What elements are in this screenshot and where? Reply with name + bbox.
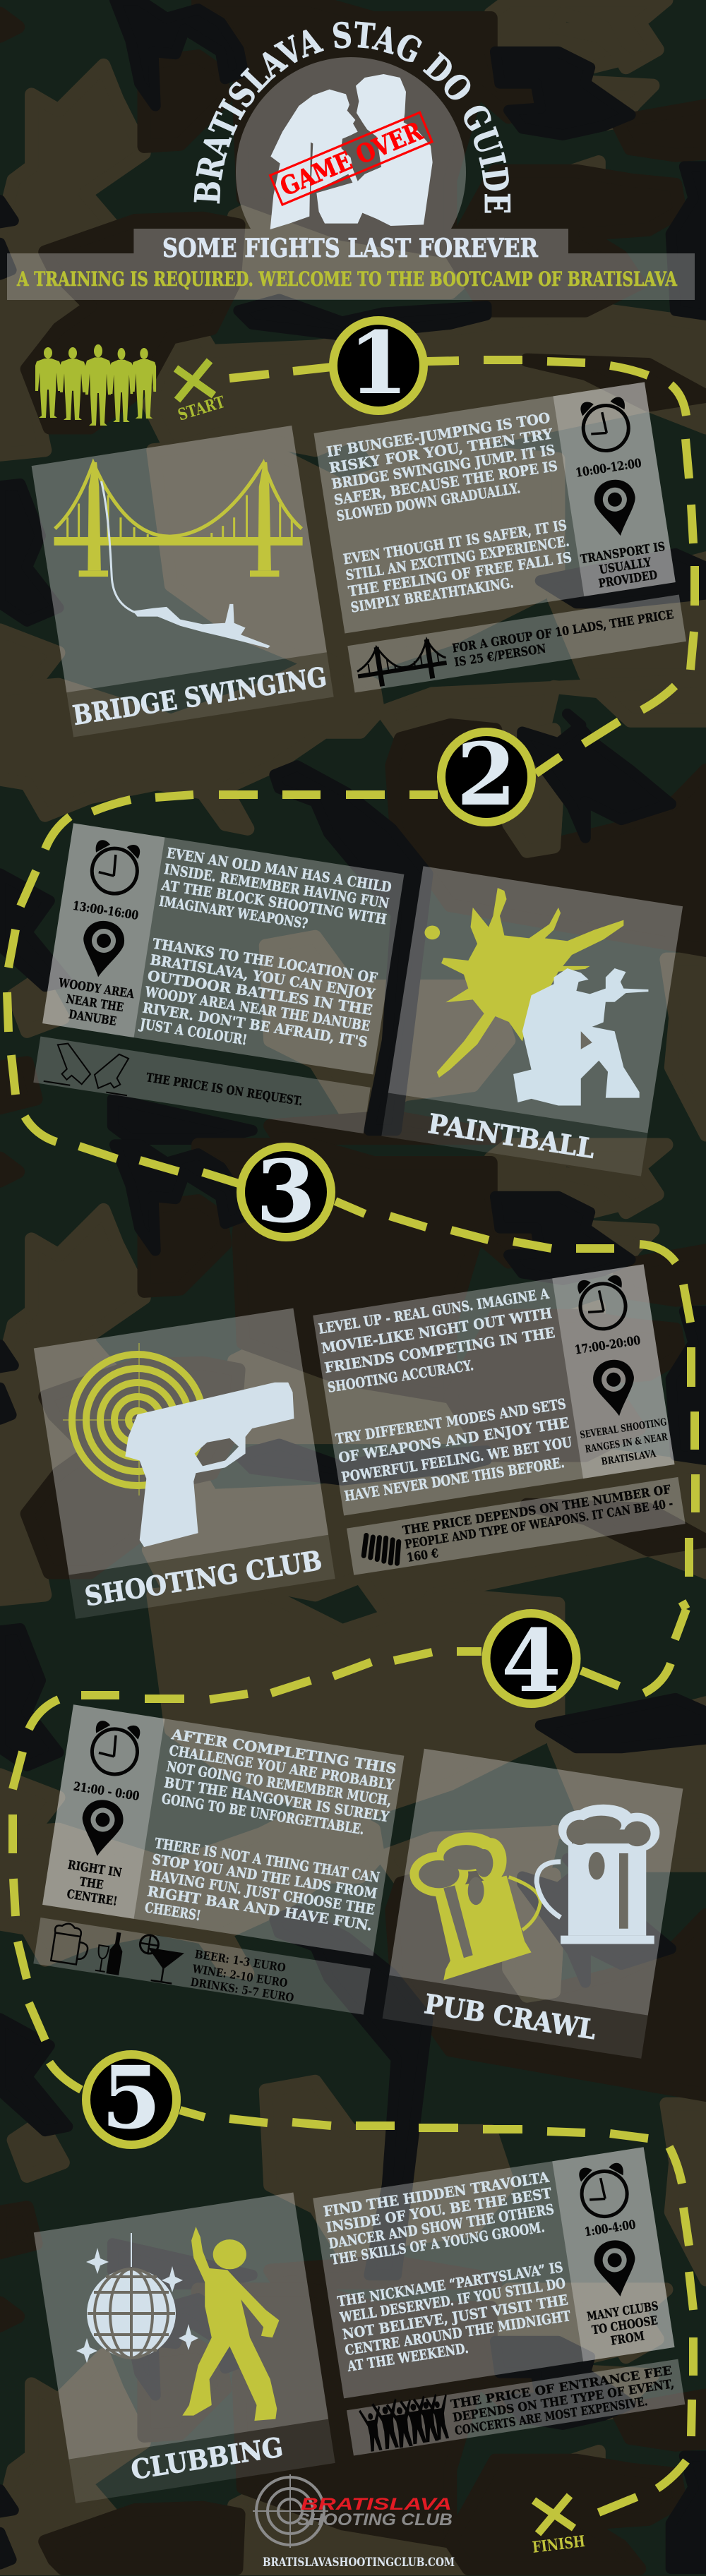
location: CENTRE! <box>66 1887 118 1909</box>
icon: clock <box>89 839 141 897</box>
icon column <box>552 2147 675 2361</box>
time: 21:00 - 0:00 <box>73 1780 140 1804</box>
paragraph 2: THERE IS NOT A THING THAT CAN <box>154 1834 381 1886</box>
paragraph 2: RIGHT BAR AND HAVE FUN. <box>146 1882 373 1934</box>
price list: DRINKS: 5-7 EURO <box>190 1975 295 2004</box>
paragraph 1 <box>160 1726 398 1841</box>
finish mark <box>532 2496 586 2557</box>
time: 17:00-20:00 <box>574 1333 642 1358</box>
paragraph 2: NOT BELIEVE, JUST VISIT THE <box>341 2291 569 2343</box>
time: 13:00-16:00 <box>72 899 140 923</box>
number 1: 1 <box>349 312 408 414</box>
finish label: FINISH <box>532 2532 586 2557</box>
location: RIGHT IN <box>67 1858 123 1880</box>
icon: beer mug <box>50 1922 91 1966</box>
paragraph 2: BRATISLAVA, YOU CAN ENJOY <box>149 951 376 1003</box>
location: BRATISLAVA <box>601 1448 657 1468</box>
paragraph 1: INSIDE. REMEMBER HAVING FUN <box>163 860 390 912</box>
paragraph 1 <box>322 2168 558 2268</box>
panel title: BRIDGE SWINGING <box>71 661 329 731</box>
panel background <box>34 1308 335 1619</box>
location: WOODY AREA <box>57 976 136 1001</box>
panel title: PAINTBALL <box>426 1107 597 1164</box>
icon: crossed paintball guns <box>43 1041 133 1095</box>
title arc: BRATISLAVA STAG DO GUIDE <box>193 21 511 213</box>
game over stamp: GAME OVER <box>276 116 427 202</box>
number 3 <box>241 1140 331 1242</box>
section 4: price panel <box>33 1918 371 2016</box>
panel title: SHOOTING CLUB <box>83 1544 324 1612</box>
icon: location pin <box>592 2237 640 2299</box>
paragraph 1: GOING TO BE UNFORGETTABLE. <box>160 1790 366 1838</box>
location: PROVIDED <box>597 568 659 591</box>
paragraph 2: THE NICKNAME “PARTYSLAVA” IS <box>336 2258 564 2310</box>
section 2: price panel <box>33 1036 371 1133</box>
location: FROM <box>610 2329 645 2349</box>
icon column <box>42 1704 164 1919</box>
icon: location pin <box>592 477 640 539</box>
paragraph 2: HAVING FUN. JUST CHOOSE THE <box>149 1867 376 1918</box>
section 3: price panel <box>347 1477 686 1575</box>
icon: clock <box>578 2162 630 2220</box>
icon: shooting target <box>63 1343 203 1495</box>
paragraph 2: TRY DIFFERENT MODES AND SETS <box>335 1395 567 1448</box>
paragraph 2: HAVE NEVER DONE THIS BEFORE. <box>343 1454 566 1505</box>
section 5: image panel <box>34 2192 335 2503</box>
icon: yellow beer mug <box>409 1832 540 1980</box>
start mark <box>176 361 227 425</box>
number 3: 3 <box>256 1140 316 1242</box>
time: 10:00-12:00 <box>575 457 642 481</box>
price text: DEPENDS ON THE TYPE OF EVENT, <box>452 2377 675 2425</box>
paragraph 1: DANCER AND SHOW THE OTHERS <box>327 2201 555 2252</box>
paragraph 1: LEVEL UP - REAL GUNS. IMAGINE A <box>317 1284 551 1337</box>
paragraph 2: CENTRE AROUND THE MIDNIGHT <box>344 2307 572 2359</box>
paragraph 2: THANKS TO THE LOCATION OF <box>151 935 378 987</box>
paragraph 1: AT THE BLOCK SHOOTING WITH <box>160 877 388 928</box>
location: DANUBE <box>68 1008 117 1029</box>
paragraph 2: RIVER. DON'T BE AFRAID, IT'S <box>141 999 369 1051</box>
paragraph 2: STILL AN EXCITING EXPERIENCE. <box>345 533 570 584</box>
paragraph 2: WELL DESERVED. IF YOU STILL DO <box>338 2275 567 2326</box>
start label: START <box>176 392 227 425</box>
icon: pistol <box>125 1383 294 1547</box>
location: NEAR THE <box>65 992 124 1015</box>
section 1: text panel <box>313 382 676 634</box>
number 2 <box>441 723 532 825</box>
icon: location pin <box>590 1357 640 1419</box>
price list <box>189 1947 299 2004</box>
icon: suspension bridge <box>54 462 303 577</box>
logo word 2: SHOOTING CLUB <box>297 2510 453 2529</box>
paragraph 2: OF WEAPONS AND ENJOY THE <box>337 1414 570 1467</box>
paragraph 1: SHOOTING ACCURACY. <box>326 1356 474 1396</box>
icon: clock <box>89 1720 141 1777</box>
location <box>579 1416 672 1470</box>
bungee jumper <box>102 481 270 648</box>
icon column <box>553 382 676 596</box>
crosshair <box>253 2474 328 2548</box>
location: USUALLY <box>598 555 652 577</box>
price list: BEER: 1-3 EURO <box>194 1947 287 1975</box>
paragraph 2 <box>342 517 575 616</box>
paragraph 1 <box>157 844 393 944</box>
number 1 <box>333 312 424 414</box>
location: THE <box>78 1875 104 1893</box>
number 5 <box>86 2047 176 2148</box>
icon: dancing crowd <box>358 2390 453 2453</box>
icon: clock <box>576 1275 629 1332</box>
number 5: 5 <box>102 2047 161 2148</box>
paragraph 2: OUTDOOR BATTLES IN THE <box>146 967 373 1018</box>
paragraph 2: WOODY AREA NEAR THE DANUBE <box>143 983 371 1035</box>
section 3: image panel <box>34 1308 335 1619</box>
icon: clock <box>579 396 632 454</box>
price text <box>450 2364 677 2438</box>
panel title: PUB CRAWL <box>422 1987 598 2045</box>
icon: disco dancer <box>182 2227 279 2421</box>
paragraph 2: STOP YOU AND THE LADS FROM <box>151 1850 378 1902</box>
icon: light beer mug <box>537 1805 659 1944</box>
logo word 1: BRATISLAVA <box>301 2495 452 2514</box>
paragraph 2 <box>335 1395 576 1505</box>
panel background <box>381 866 683 1176</box>
start group of men <box>35 344 156 426</box>
paragraph 1: FRIENDS COMPETING IN THE <box>323 1324 556 1376</box>
price list: WINE: 2-10 EURO <box>191 1962 289 1990</box>
icon: location pin <box>77 1797 126 1859</box>
paragraph 1 <box>317 1284 559 1396</box>
paragraph 1: SAFER, BECAUSE THE ROPE IS <box>333 457 558 508</box>
number 4: 4 <box>501 1610 561 1711</box>
paragraph 1: EVEN AN OLD MAN HAS A CHILD <box>165 844 393 896</box>
icon column <box>42 823 164 1037</box>
price text: THE PRICE IS ON REQUEST. <box>145 1071 304 1109</box>
price text: 160 € <box>406 1546 440 1565</box>
price text: THE PRICE OF ENTRANCE FEE <box>450 2364 673 2412</box>
location: RANGES IN & NEAR <box>585 1431 669 1455</box>
paragraph 1: BRIDGE SWINGING JUMP. IT IS <box>330 441 556 493</box>
slogan: SOME FIGHTS LAST FOREVER <box>162 234 539 263</box>
location <box>52 976 136 1031</box>
icon: bridge <box>354 637 449 690</box>
panel background <box>32 426 334 738</box>
price text: THE PRICE DEPENDS ON THE NUMBER OF <box>402 1483 672 1538</box>
section 5: price panel <box>346 2354 685 2456</box>
paragraph 1: CHALLENGE YOU ARE PROBABLY <box>168 1742 395 1793</box>
paragraph 2 <box>335 2258 574 2375</box>
paragraph 2: CHEERS! <box>143 1898 202 1924</box>
paragraph 2 <box>143 1834 381 1950</box>
paragraph 1 <box>325 409 562 524</box>
section 2: image panel <box>381 866 683 1176</box>
paragraph 1: IMAGINARY WEAPONS? <box>158 892 309 932</box>
icon: disco ball <box>76 2233 198 2363</box>
location <box>62 1858 123 1909</box>
icon column <box>552 1264 675 1479</box>
price text: IS 25 €/PERSON <box>453 642 547 670</box>
paragraph 1: NOT GOING TO REMEMBER MUCH, <box>165 1758 393 1810</box>
panel title: CLUBBING <box>128 2431 285 2486</box>
paragraph 1: MOVIE-LIKE NIGHT OUT WITH <box>321 1304 553 1356</box>
location: SEVERAL SHOOTING <box>579 1416 667 1441</box>
emblem circle <box>236 57 466 229</box>
couple silhouette <box>270 74 433 229</box>
section 2: text panel <box>42 823 404 1075</box>
section 4: text panel <box>42 1704 404 1956</box>
location <box>580 540 670 594</box>
section 1: image panel <box>32 426 334 738</box>
paragraph 1: FIND THE HIDDEN TRAVOLTA <box>322 2168 551 2220</box>
paragraph 1: BUT THE HANGOVER IS SURELY <box>163 1774 390 1825</box>
location: TO CHOOSE <box>591 2313 659 2337</box>
price text <box>451 608 677 670</box>
subtitle banner <box>7 229 695 300</box>
paragraph 1: RISKY FOR YOU, THEN TRY <box>328 425 554 476</box>
logo: bratislava shooting club <box>253 2474 453 2548</box>
paragraph 2: JUST A COLOUR! <box>138 1015 249 1048</box>
price text: CONCERTS ARE MOST EXPENSIVE. <box>454 2395 649 2438</box>
section 1: price panel <box>347 595 686 692</box>
paragraph 1: SLOWED DOWN GRADUALLY. <box>335 479 522 524</box>
section 5: text panel <box>313 2147 675 2398</box>
paint splat <box>424 888 623 1078</box>
paragraph 2: POWERFUL FEELING. WE BET YOU <box>340 1433 573 1486</box>
paragraph 2: AT THE WEEKEND. <box>346 2340 469 2375</box>
paragraph 1: INSIDE OF YOU. BE THE BEST <box>325 2184 553 2236</box>
number 4 <box>486 1610 576 1711</box>
panel background <box>383 1749 683 2059</box>
paragraph 2: SIMPLY BREATHTAKING. <box>349 574 515 616</box>
icon: location pin <box>78 918 127 980</box>
location <box>586 2299 664 2352</box>
icon: cocktail <box>135 1934 184 1985</box>
icon: bullets <box>361 1531 402 1568</box>
section 3: text panel <box>313 1264 675 1516</box>
location: TRANSPORT IS <box>580 540 666 567</box>
panel background <box>34 2192 335 2503</box>
time: 1:00-4:00 <box>584 2217 637 2239</box>
paragraph 2: THE FEELING OF FREE FALL IS <box>347 548 573 600</box>
icon: wine and bottle <box>95 1930 125 1975</box>
paragraph 2 <box>138 934 379 1066</box>
header emblem <box>193 21 511 229</box>
website url: BRATISLAVASHOOTINGCLUB.COM <box>263 2556 455 2570</box>
paragraph 1: IF BUNGEE-JUMPING IS TOO <box>325 409 551 460</box>
paragraph 2: EVEN THOUGH IT IS SAFER, IT IS <box>342 517 568 567</box>
section 4: image panel <box>383 1749 683 2059</box>
paragraph 1: THE SKILLS OF A YOUNG GROOM. <box>330 2218 546 2268</box>
paintball soldier <box>513 968 648 1106</box>
location: MANY CLUBS <box>586 2299 659 2324</box>
paragraph 1: AFTER COMPLETING THIS <box>169 1726 397 1777</box>
number 2: 2 <box>457 723 516 825</box>
